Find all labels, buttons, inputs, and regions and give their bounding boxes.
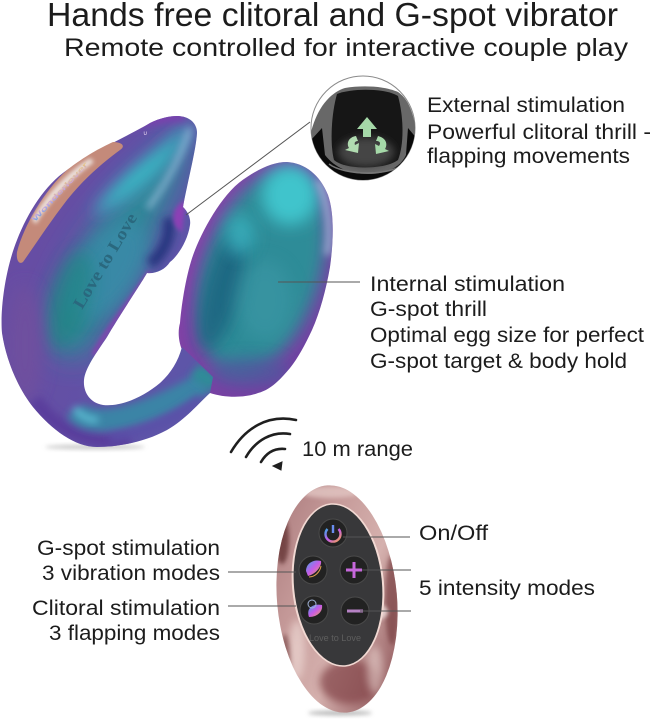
logo band (31, 158, 94, 224)
text: internal stimulation (370, 273, 644, 373)
text: internal stimulation: G-spot target & body hold (370, 350, 627, 373)
text: on/off: On/Off (419, 522, 488, 545)
brand text: Love to Love (69, 209, 141, 312)
bezel (311, 86, 415, 180)
tiny power mark: ∪ (143, 131, 147, 137)
stem of U-bend (76, 382, 205, 420)
leader lines: remote (228, 537, 411, 611)
button: clitoral (300, 596, 328, 624)
text: external stimulation: Powerful clitoral thrill - (427, 121, 651, 144)
text: internal stimulation: G-spot thrill (370, 298, 487, 321)
text: external stimulation: flapping movements (427, 145, 630, 168)
text: clitoral stimulation (32, 597, 220, 645)
button: plus (340, 556, 368, 584)
button: minus (341, 597, 369, 625)
text: clitoral stimulation: 3 flapping modes (49, 622, 220, 645)
text: intensity modes: 5 intensity modes (419, 577, 595, 600)
lower black rim (312, 128, 414, 180)
vibrator egg (178, 162, 333, 397)
vibrator product image (0, 110, 350, 450)
remote brand text: Love to Love (309, 633, 361, 643)
logo text: Wonderlover (31, 161, 90, 223)
text: G-spot stimulation: 3 vibration modes (42, 562, 220, 585)
text: internal stimulation: Optimal egg size for perfect (370, 324, 644, 347)
remote panel (285, 499, 391, 671)
leader line: external (186, 122, 310, 215)
text: external stimulation (427, 94, 651, 168)
button: power (319, 519, 347, 547)
text: G-spot stimulation: G-spot stimulation (37, 537, 220, 560)
remote reflections (275, 486, 399, 704)
subtitle: Remote controlled for interactive couple play (64, 34, 629, 62)
text: external stimulation: External stimulation (427, 94, 625, 117)
text: range: 10 m range (302, 438, 413, 461)
leader line: internal (278, 281, 360, 283)
vibrator clitoral arm (0, 110, 215, 450)
icon: flapping arrows (345, 117, 389, 154)
remote control (276, 485, 398, 718)
inner cavity (332, 90, 402, 168)
remote body (267, 480, 407, 718)
product shadow (45, 444, 145, 450)
text: G-spot stimulation (37, 537, 220, 585)
icon: wireless signal (231, 419, 296, 470)
inset circle: clitoral head (311, 76, 418, 190)
remote shadow (308, 710, 372, 716)
button: G-spot (299, 556, 327, 584)
text: internal stimulation: Internal stimulation (370, 273, 565, 296)
copper panel (17, 142, 123, 263)
text: clitoral stimulation: Clitoral stimulation (32, 597, 220, 620)
